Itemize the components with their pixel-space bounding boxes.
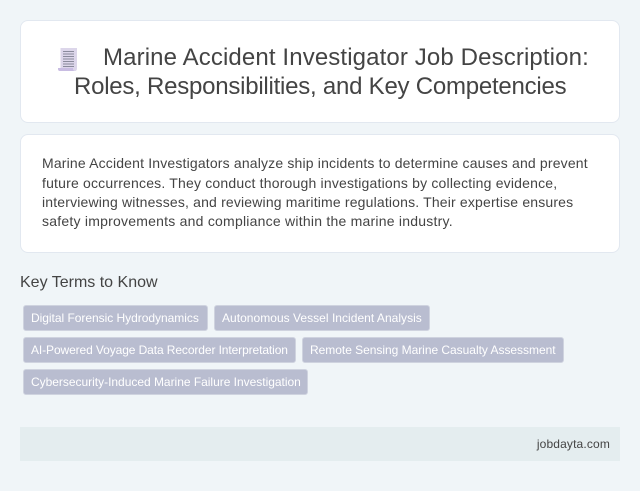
description text: future occurrences. They conduct thorough investigations by collecting evidence,	[42, 175, 557, 191]
title card	[20, 20, 620, 123]
title: Marine Accident Investigator Job Description:	[103, 44, 589, 71]
footer source: jobdayta.com	[537, 437, 610, 451]
footer bar	[20, 427, 620, 461]
tag: Remote Sensing Marine Casualty Assessment	[310, 343, 556, 357]
heading: key terms: Key Terms to Know	[20, 274, 158, 291]
description text: safety improvements and compliance within the marine industry.	[42, 213, 453, 229]
description text: Marine Accident Investigators analyze ship incidents to determine causes and prevent	[42, 155, 588, 171]
description text: interviewing witnesses, and reviewing maritime regulations. Their expertise ensures	[42, 194, 573, 210]
tag	[23, 305, 208, 331]
tag: Autonomous Vessel Incident Analysis	[222, 311, 422, 325]
tags	[23, 305, 564, 395]
tag: AI-Powered Voyage Data Recorder Interpretation	[31, 343, 288, 357]
tag	[302, 337, 564, 363]
tag: Cybersecurity-Induced Marine Failure Investigation	[31, 375, 301, 389]
title: Roles, Responsibilities, and Key Competencies	[74, 73, 566, 100]
description text	[42, 155, 588, 229]
description card	[20, 134, 620, 253]
tag	[214, 305, 430, 331]
tag: Digital Forensic Hydrodynamics	[31, 311, 199, 325]
tag	[23, 337, 296, 363]
title	[74, 44, 589, 100]
icon: document scroll	[58, 48, 77, 71]
tag	[23, 369, 308, 395]
